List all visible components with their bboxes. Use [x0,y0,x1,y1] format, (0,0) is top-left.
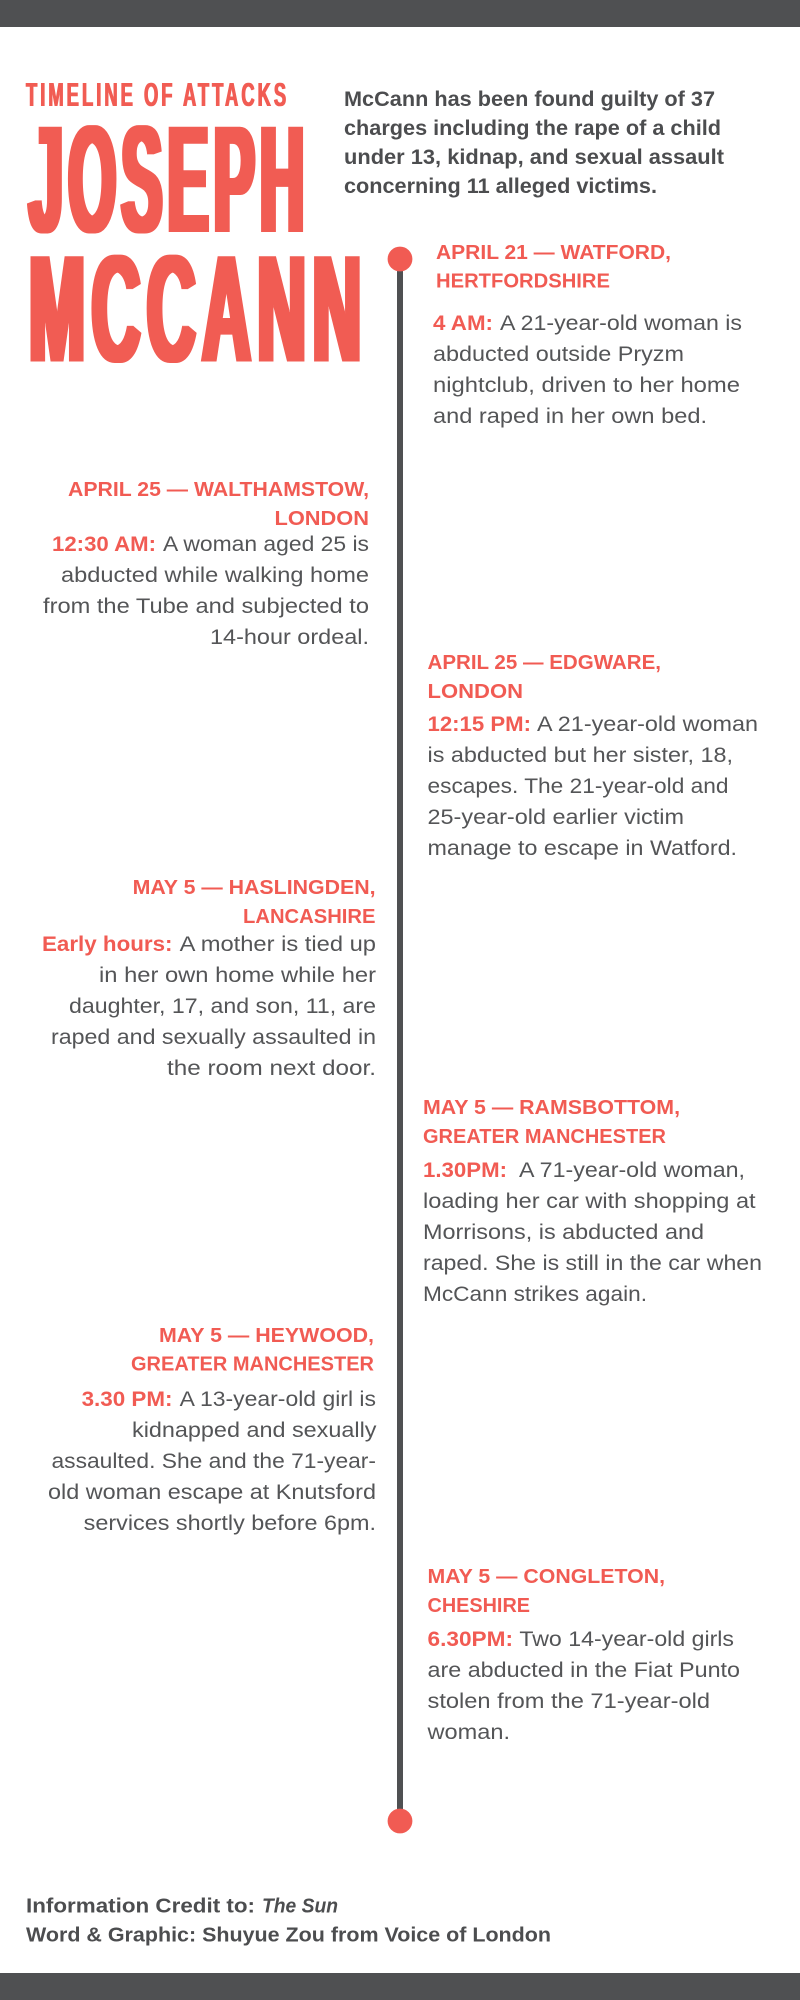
event: April 25 Edgware: LONDON [428,680,523,703]
bottom bar [0,1973,800,2000]
event: May 5 Haslingden [42,876,376,1080]
event: April 21 Watford: A 21-year-old woman is [500,311,742,335]
event: April 25 Walthamstow: abducted while walking home [61,563,369,587]
event: May 5 Ramsbottom: A 71-year-old woman, [519,1158,745,1182]
timeline start dot [388,247,412,271]
event: May 5 Congleton: are abducted in the Fiat Punto [428,1658,740,1682]
event: May 5 Haslingden: raped and sexually assaulted in [51,1025,376,1049]
event: April 25 Walthamstow: 12:30 AM: [52,532,156,556]
event: April 25 Edgware: APRIL 25 — EDGWARE, [428,651,661,674]
event: May 5 Haslingden: Early hours: [42,932,172,956]
event: April 25 Edgware: 25-year-old earlier victim [428,805,684,829]
event: May 5 Haslingden: the room next door. [167,1056,376,1080]
event: April 25 Walthamstow [43,478,369,649]
title: Joseph McCann [29,94,361,395]
event: May 5 Heywood: services shortly before 6pm. [84,1511,376,1535]
event: May 5 Congleton: CHESHIRE [428,1594,530,1617]
intro text [344,88,724,198]
event: May 5 Ramsbottom: loading her car with shopping at [423,1189,756,1213]
event: April 25 Edgware [428,651,758,860]
event: April 21 Watford: and raped in her own bed. [433,404,707,428]
event: May 5 Congleton: Two 14-year-old girls [519,1627,734,1651]
event: April 21 Watford: abducted outside Pryzm [433,342,684,366]
event: May 5 Congleton: woman. [426,1720,510,1744]
intro text: concerning 11 alleged victims. [344,175,657,198]
footer credits: Information Credit to: [26,1896,255,1918]
intro text: under 13, kidnap, and sexual assault [344,146,724,169]
footer credits [26,1896,551,1947]
event: May 5 Ramsbottom: Morrisons, is abducted and [423,1220,704,1244]
footer credits: Word & Graphic: Shuyue Zou from Voice of London [26,1925,551,1947]
event: May 5 Heywood [48,1324,377,1535]
event: May 5 Congleton: stolen from the 71-year-old [428,1689,710,1713]
event: May 5 Congleton: 6.30PM: [428,1627,513,1651]
event: May 5 Heywood: assaulted. She and the 71-year- [52,1449,376,1473]
event: May 5 Ramsbottom: GREATER MANCHESTER [423,1125,666,1148]
title: Joseph McCann: JOSEPH [29,94,304,265]
event: April 25 Walthamstow: from the Tube and subjected to [43,594,369,618]
event: May 5 Ramsbottom: 1.30PM: [423,1158,507,1182]
event: May 5 Ramsbottom: McCann strikes again. [423,1282,647,1306]
event: May 5 Ramsbottom: raped. She is still in the car when [423,1251,762,1275]
title: Joseph McCann: MCCANN [29,224,361,395]
event: April 21 Watford: HERTFORDSHIRE [436,270,610,292]
event: May 5 Heywood: MAY 5 — HEYWOOD, [159,1324,374,1347]
intro text: McCann has been found guilty of 37 [344,88,715,111]
event: April 25 Walthamstow: APRIL 25 — WALTHAMSTOW, [68,478,369,501]
event: April 25 Walthamstow: LONDON [274,507,369,530]
event: April 25 Walthamstow: 14-hour ordeal. [210,625,369,649]
subtitle: timeline of attacks: TIMELINE OF ATTACKS [26,76,286,113]
event: April 25 Edgware: 12:15 PM: [428,712,531,736]
footer credits: The Sun [262,1896,338,1918]
timeline end dot [388,1809,412,1833]
event: April 25 Edgware: A 21-year-old woman [537,712,758,736]
event: May 5 Heywood: A 13-year-old girl is [180,1387,376,1411]
event: May 5 Heywood: kidnapped and sexually [132,1418,377,1442]
event: May 5 Haslingden: A mother is tied up [180,932,376,956]
event: May 5 Haslingden: in her own home while her [99,963,376,987]
event: May 5 Haslingden: MAY 5 — HASLINGDEN, [133,876,376,899]
event: April 21 Watford [433,241,742,428]
top bar [0,0,800,27]
event: May 5 Heywood: GREATER MANCHESTER [131,1353,374,1376]
event: April 25 Walthamstow: A woman aged 25 is [163,532,369,556]
event: April 25 Edgware: manage to escape in Watford. [428,836,737,860]
event: May 5 Haslingden: daughter, 17, and son, 11, are [69,994,376,1018]
intro text: charges including the rape of a child [344,117,721,140]
event: April 21 Watford: APRIL 21 — WATFORD, [436,241,671,264]
timeline axis [388,247,412,1833]
event: May 5 Congleton: MAY 5 — CONGLETON, [428,1565,665,1588]
event: May 5 Ramsbottom: MAY 5 — RAMSBOTTOM, [423,1096,680,1119]
event: May 5 Ramsbottom [423,1096,762,1306]
event: April 21 Watford: 4 AM: [433,311,493,335]
event: April 25 Edgware: escapes. The 21-year-old and [428,774,728,798]
event: April 25 Edgware: is abducted but her sister, 18, [428,743,733,767]
event: April 21 Watford: nightclub, driven to her home [433,373,740,397]
event: May 5 Heywood: old woman escape at Knutsford [48,1480,376,1504]
event: May 5 Heywood: 3.30 PM: [82,1387,172,1411]
event: May 5 Haslingden: LANCASHIRE [243,905,376,928]
event: May 5 Congleton [426,1565,740,1744]
